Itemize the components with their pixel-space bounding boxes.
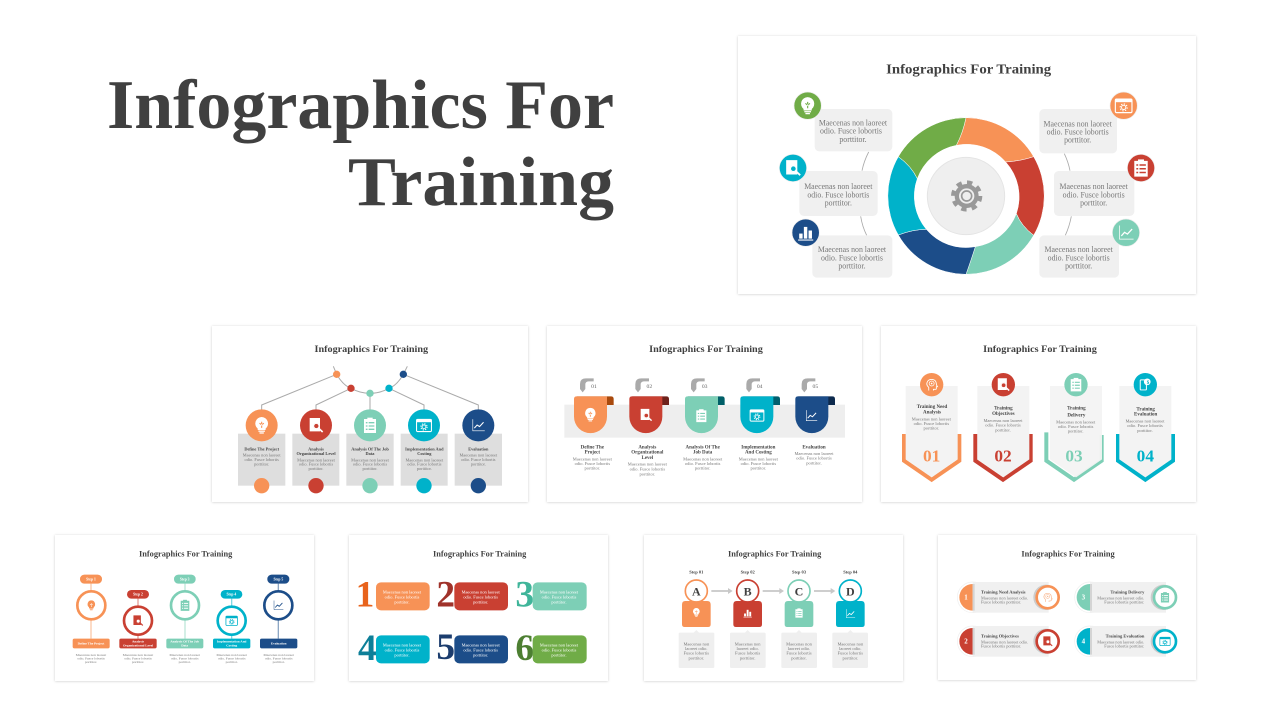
card: analysis of the job data: Analysis Of The Job [351, 446, 389, 451]
row: training evaluation [1075, 626, 1176, 657]
step 04 [739, 378, 780, 471]
step 02: Organizational [631, 451, 664, 456]
icon: green bulb [794, 92, 821, 119]
text box: top left [815, 109, 892, 151]
row: training evaluation: Training Evaluation [1106, 633, 1145, 638]
box 5: Maecenas non laoreet [462, 643, 501, 648]
panel: tree slide [212, 326, 528, 502]
icon: red clipboard [1127, 154, 1155, 182]
text box: bottom left: porttitor. [838, 261, 866, 270]
step 4: Step 4 [227, 593, 236, 597]
panel: A B C D steps slide [644, 535, 903, 681]
step 5 [260, 575, 297, 664]
card: implementation and costing: odio. Fusce lobortis [407, 462, 442, 467]
panel: donut slide [738, 36, 1196, 294]
text box: bottom right [1039, 235, 1119, 278]
text box: bottom left: odio. Fusce lobortis [821, 253, 883, 262]
box 3: Maecenas non laoreet [540, 590, 579, 595]
row: training delivery: Fusce lobortis porttitor. [1104, 600, 1144, 605]
step B: Step 02 [741, 570, 755, 575]
step D: porttitor. [843, 655, 858, 660]
step 1: odio. Fusce lobortis [77, 657, 105, 661]
step 01 [573, 378, 614, 471]
text box: top right [1039, 109, 1117, 153]
card 02: Maecenas non laoreet [983, 418, 1023, 423]
card: define the project: odio. Fusce lobortis [245, 457, 279, 462]
step C: Fusce lobortis [786, 651, 812, 656]
box 5: odio. Fusce lobortis [463, 648, 498, 653]
row: training evaluation: 4 [1082, 638, 1086, 646]
box 6 [515, 628, 587, 669]
card: analysis of the job data [346, 409, 394, 493]
card 04: porttitor. [1137, 428, 1153, 433]
step 4: Costing [226, 643, 237, 647]
panel: half-circle pills slide: Infographics For Training [1021, 549, 1115, 558]
step D [832, 570, 868, 668]
step 01: porttitor. [585, 466, 600, 471]
card 02 [975, 373, 1031, 480]
step 05: Evaluation [802, 445, 826, 450]
step A: Step 01 [689, 570, 704, 575]
panel: pentagon slide [881, 326, 1196, 502]
card 03 [1046, 373, 1102, 480]
step 5: Step 5 [274, 578, 283, 582]
step C: laoreet odio. [788, 646, 810, 651]
box 4: Maecenas non laoreet [383, 643, 422, 648]
card: evaluation: Evaluation [468, 446, 489, 451]
card: define the project: Maecenas non laoreet [243, 453, 281, 458]
card 01 [904, 373, 959, 480]
text box: top right: Maecenas non laoreet [1044, 120, 1113, 129]
step 4 [213, 590, 250, 664]
step 2: Organizational Level [123, 643, 153, 647]
box 4 [358, 628, 430, 669]
box 4: 4 [358, 628, 377, 669]
step A: laoreet odio. [685, 646, 708, 651]
card: analysis of the job data: Maecenas non laoreet [351, 457, 390, 462]
box 2 [436, 575, 508, 616]
row: training objectives: Fusce lobortis porttitor. [981, 644, 1021, 649]
row: training evaluation: Maecenas non laoreet odio. [1097, 639, 1144, 644]
step 2 [119, 590, 157, 664]
card: analysis organizational level: porttitor. [308, 466, 324, 471]
text box: middle left: Maecenas non laoreet [804, 182, 873, 191]
step B [730, 570, 766, 668]
text box: middle right: porttitor. [1080, 198, 1107, 207]
card 03: Maecenas non laoreet [1056, 419, 1096, 424]
step 3 [166, 575, 203, 664]
text box: bottom right: odio. Fusce lobortis [1048, 253, 1110, 262]
step 01: 01 [591, 384, 597, 390]
card 04: Evaluation [1134, 413, 1158, 418]
step 4: Maecenas non laoreet [216, 653, 247, 657]
row: training delivery: 3 [1082, 594, 1086, 602]
step 02: Maecenas non laoreet [628, 462, 668, 467]
icon: navy bars [792, 219, 819, 246]
card: analysis organizational level: Analysis [308, 446, 324, 451]
row: training objectives: Maecenas non laoreet odio. [981, 639, 1028, 644]
row: training need analysis: Fusce lobortis porttitor. [981, 600, 1021, 605]
text box: top left: porttitor. [839, 135, 867, 144]
card 03: odio. Fusce lobortis [1058, 424, 1094, 429]
row: training need analysis [957, 582, 1059, 613]
step C: C [795, 584, 803, 598]
card 04: Maecenas non laoreet [1125, 418, 1165, 423]
step 01: Maecenas non laoreet [573, 456, 613, 461]
title: Training [348, 144, 614, 221]
step 1: Maecenas non laoreet [76, 653, 106, 657]
step A: Fusce lobortis [684, 651, 709, 656]
row: training delivery: Training Delivery [1110, 589, 1145, 594]
step 03: Job Data [693, 451, 713, 456]
step 1: Step 1 [86, 578, 96, 582]
step 3: Step 3 [180, 578, 190, 582]
card 04 [1118, 373, 1173, 480]
panel: A B C D steps slide: Infographics For Training [728, 549, 821, 558]
panel: numbered boxes slide [349, 535, 608, 681]
text box: bottom right: Maecenas non laoreet [1045, 245, 1114, 254]
step 1 [73, 575, 110, 664]
card 01: Analysis [923, 411, 941, 416]
step D: Fusce lobortis [838, 651, 863, 656]
step 02: Analysis [638, 445, 656, 450]
step 2: odio. Fusce lobortis [124, 657, 152, 661]
step 03: Maecenas non laoreet [683, 456, 723, 461]
row: training delivery: Maecenas non laoreet odio. [1097, 595, 1144, 600]
panel: ribbon slide: Infographics For Training [649, 344, 763, 355]
card: implementation and costing: Costing [417, 451, 432, 456]
step D: Maecenas non [837, 642, 864, 647]
card: define the project: porttitor. [254, 461, 269, 466]
card 02: porttitor. [995, 427, 1011, 432]
card 01: odio. Fusce lobortis [914, 421, 949, 426]
box 6: Maecenas non laoreet [540, 643, 579, 648]
card 04: Training [1136, 407, 1155, 412]
box 2: 2 [436, 575, 455, 616]
icon: teal line chart [1112, 219, 1140, 246]
step B: porttitor. [740, 655, 755, 660]
row: training delivery [1075, 582, 1176, 613]
card: analysis organizational level: odio. Fusce lobortis [299, 462, 333, 467]
step 05: 05 [813, 384, 818, 390]
step 04: And Costing [745, 451, 772, 456]
box 5 [436, 627, 508, 668]
text box: middle right: Maecenas non laoreet [1060, 182, 1129, 191]
step 04: 04 [757, 384, 763, 390]
card: analysis of the job data: Data [366, 451, 375, 456]
step 04: Implementation [741, 445, 776, 450]
card: evaluation [455, 409, 502, 493]
card: analysis organizational level [292, 409, 339, 493]
step 05: porttitor. [806, 461, 822, 466]
step 03 [683, 378, 725, 471]
step 2: Maecenas non laoreet [123, 653, 153, 657]
card 03: Training [1067, 407, 1086, 412]
step 04: odio. Fusce lobortis [741, 461, 776, 466]
card 01: Training Need [917, 405, 947, 410]
step 02 [628, 378, 669, 476]
step 2: Step 2 [133, 593, 143, 597]
card: define the project [238, 409, 285, 493]
panel: step pills slide: Infographics For Training [139, 549, 232, 558]
icon: cyan search [779, 154, 807, 182]
step 04: Maecenas non laoreet [739, 456, 779, 461]
box 4: odio. Fusce lobortis [385, 648, 420, 653]
row: training need analysis: Maecenas non laoreet odio. [981, 595, 1028, 600]
step 02: odio. Fusce lobortis [630, 467, 665, 472]
step 03: Analysis Of The [686, 445, 721, 450]
step 02: Level [642, 456, 654, 461]
box 1 [356, 575, 430, 616]
row: training need analysis: Training Need Analysis [981, 589, 1026, 594]
step 01: Project [585, 451, 600, 456]
card: implementation and costing: Maecenas non laoreet [405, 457, 444, 462]
box 3: porttitor. [551, 599, 567, 604]
title: Infographics For [107, 67, 614, 144]
step A: A [692, 584, 701, 598]
step 01: odio. Fusce lobortis [575, 461, 610, 466]
step 2: porttitor. [132, 660, 144, 664]
card: evaluation: odio. Fusce lobortis [461, 457, 496, 462]
step D: laoreet odio. [839, 646, 862, 651]
title [107, 67, 614, 221]
step 3: porttitor. [179, 660, 191, 664]
card 02: Training [994, 407, 1013, 412]
step A: Maecenas non [683, 642, 710, 647]
card 02: odio. Fusce lobortis [985, 423, 1021, 428]
panel: step pills slide [55, 535, 314, 681]
step B: Maecenas non [735, 642, 761, 647]
card: analysis organizational level: Organizational Level [296, 451, 336, 456]
box 2: odio. Fusce lobortis [463, 595, 498, 600]
step 3: odio. Fusce lobortis [171, 657, 199, 661]
box 2: porttitor. [473, 599, 488, 604]
step 02: porttitor. [640, 471, 655, 476]
card 04: odio. Fusce lobortis [1127, 423, 1163, 428]
card 03: 03 [1065, 446, 1083, 465]
text box: middle left: odio. Fusce lobortis [807, 190, 869, 199]
step 05: Maecenas non laoreet [794, 451, 834, 456]
card 01: Maecenas non laoreet [912, 416, 952, 421]
step C [781, 570, 817, 668]
step 3: Maecenas non laoreet [169, 653, 200, 657]
box 2: Maecenas non laoreet [462, 590, 501, 595]
row: training evaluation: Fusce lobortis porttitor. [1104, 644, 1144, 649]
box 6: odio. Fusce lobortis [542, 648, 577, 653]
card 04: 04 [1137, 446, 1154, 465]
panel: ribbon slide [547, 326, 862, 502]
donut chart [888, 118, 1044, 274]
step 2: Analysis [132, 640, 145, 644]
box 3: odio. Fusce lobortis [542, 595, 577, 600]
step 5: porttitor. [273, 660, 285, 664]
panel: pentagon slide: Infographics For Training [983, 344, 1097, 355]
step 02: 02 [647, 384, 652, 390]
step 05 [794, 378, 835, 466]
box 3 [515, 575, 587, 616]
step 4: odio. Fusce lobortis [218, 657, 246, 661]
text box: middle right [1054, 171, 1134, 216]
step 5: odio. Fusce lobortis [265, 657, 293, 661]
card: define the project: Define The Project [244, 446, 280, 451]
row: training need analysis: 1 [964, 594, 968, 602]
text box: top right: odio. Fusce lobortis [1047, 128, 1109, 137]
step B: Fusce lobortis [735, 651, 761, 656]
step C: Maecenas non [786, 642, 813, 647]
step 03: porttitor. [695, 466, 710, 471]
box 5: porttitor. [473, 652, 488, 657]
arrows [711, 588, 835, 594]
box 1: odio. Fusce lobortis [385, 595, 420, 600]
card 02: 02 [994, 446, 1012, 465]
card 01: 01 [923, 446, 940, 465]
panel: tree slide: Infographics For Training [314, 344, 428, 355]
card: implementation and costing: Implementation And [405, 446, 444, 451]
row: training objectives [957, 626, 1059, 657]
step C: porttitor. [791, 655, 807, 660]
icon: orange browser [1110, 92, 1137, 119]
step 04: porttitor. [751, 466, 766, 471]
card 03: Delivery [1067, 413, 1086, 418]
panel: half-circle pills slide [938, 535, 1196, 680]
icon: gear [954, 183, 980, 209]
box 4: porttitor. [394, 652, 410, 657]
step 5: Evaluation [271, 642, 287, 646]
panel: numbered boxes slide: Infographics For Training [433, 549, 526, 558]
step 01: Define The [581, 445, 605, 450]
box 6: 6 [515, 628, 534, 669]
box 1: 1 [356, 575, 374, 616]
card: evaluation: Maecenas non laoreet [459, 453, 498, 458]
text box: bottom right: porttitor. [1065, 261, 1092, 270]
card: implementation and costing [401, 409, 448, 493]
step 1: porttitor. [85, 660, 97, 664]
card 01: porttitor. [924, 426, 939, 431]
step 1: Define The Project [78, 642, 105, 646]
row: training objectives: 2 [964, 638, 968, 646]
card: analysis organizational level: Maecenas non laoreet [297, 457, 336, 462]
step C: Step 03 [792, 570, 807, 575]
card: evaluation: porttitor. [471, 461, 486, 466]
step 05: odio. Fusce lobortis [796, 456, 832, 461]
step A [679, 570, 714, 668]
box 6: porttitor. [551, 652, 567, 657]
box 1: Maecenas non laoreet [383, 590, 422, 595]
box 3: 3 [515, 575, 534, 616]
step A: porttitor. [689, 655, 704, 660]
step 4: porttitor. [226, 660, 238, 664]
text box: top left: Maecenas non laoreet [819, 118, 888, 127]
text box: bottom left: Maecenas non laoreet [818, 245, 887, 254]
step 3: Data [181, 643, 188, 647]
step D: Step 04 [843, 570, 858, 575]
box 1: porttitor. [394, 599, 410, 604]
step 5: Maecenas non laoreet [263, 653, 294, 657]
text box: middle left [799, 171, 878, 216]
step 03: odio. Fusce lobortis [685, 461, 721, 466]
text box: bottom left [812, 235, 892, 278]
card: implementation and costing: porttitor. [417, 466, 432, 471]
step 03: 03 [702, 384, 708, 390]
row: training objectives: Training Objectives [981, 633, 1019, 638]
card: analysis of the job data: porttitor. [362, 466, 378, 471]
step B: B [744, 584, 752, 598]
text box: top right: porttitor. [1064, 136, 1091, 145]
box 5: 5 [436, 627, 455, 668]
card: analysis of the job data: odio. Fusce lobortis [353, 462, 387, 467]
text box: middle right: odio. Fusce lobortis [1063, 190, 1125, 199]
text box: middle left: porttitor. [825, 198, 852, 207]
step 3: Analysis Of The Job [170, 640, 199, 644]
card 04: $ [1147, 381, 1150, 386]
panel: donut slide: Infographics For Training [886, 63, 1051, 78]
card 02: Objectives [992, 412, 1015, 417]
card 03: porttitor. [1068, 429, 1083, 434]
step B: laoreet odio. [736, 646, 759, 651]
text box: top left: odio. Fusce lobortis [820, 127, 882, 136]
step D: D [846, 584, 855, 598]
step 4: Implementation And [217, 640, 247, 644]
